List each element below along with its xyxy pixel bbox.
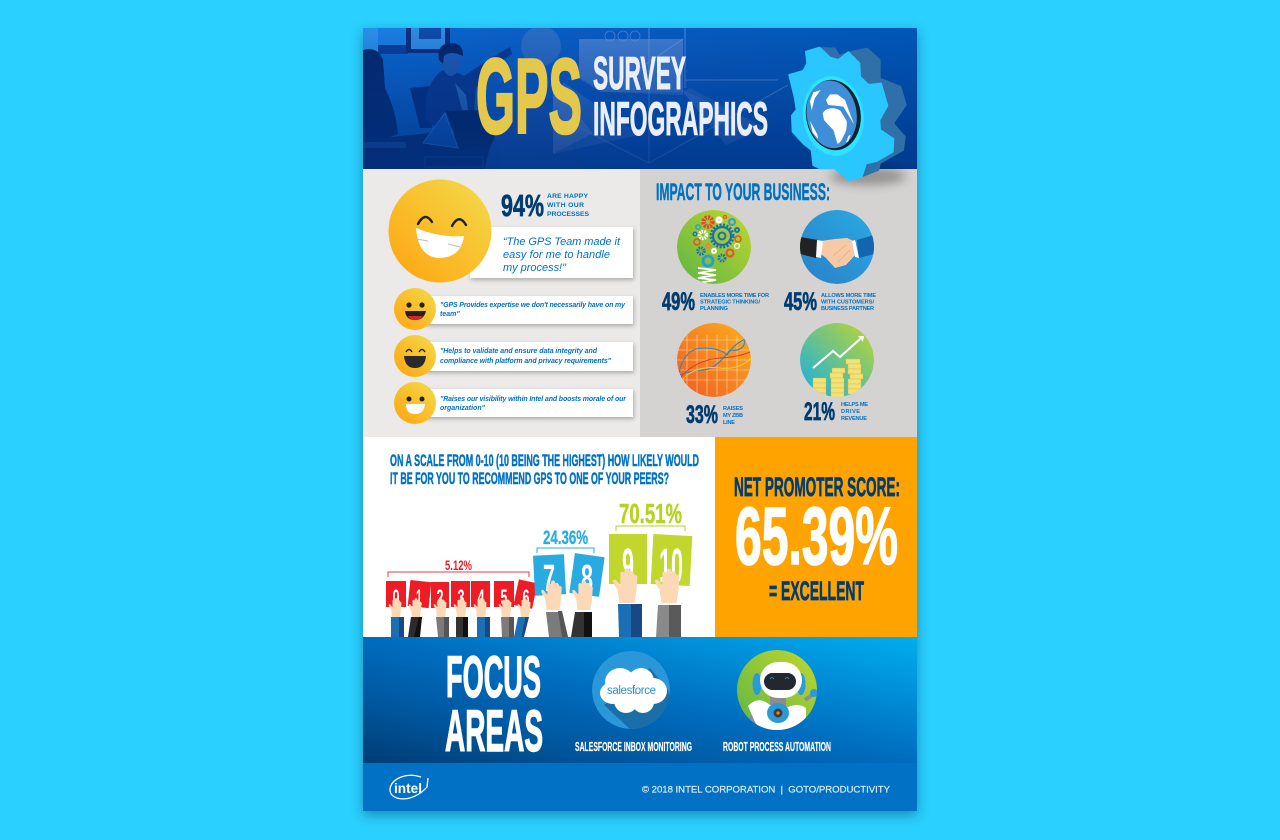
panel: impact — [640, 169, 917, 437]
callout: quote visibility: organization" — [440, 405, 486, 412]
callout: main quote — [470, 227, 633, 278]
icon: smiley black mouth — [394, 335, 436, 377]
panel: happiness — [363, 169, 640, 437]
icon: handshake — [800, 210, 874, 284]
heading: impact to your business: IMPACT TO YOUR BUSINESS: — [656, 179, 830, 206]
callout: quote data integrity: "Helps to validate and ensure data integrity and — [440, 348, 598, 355]
panel: focus areas — [363, 637, 917, 764]
chart: score 0 to 6 hands: 6 — [522, 585, 530, 610]
photo: meeting room — [363, 28, 561, 169]
icon: growth chart — [677, 323, 751, 397]
heading: survey question: IT BE FOR YOU TO RECOMMEND GPS TO ONE OF YOUR PEERS? — [390, 469, 669, 488]
score value: 65.39% — [735, 491, 898, 582]
panel: focus areas: FOCUS — [446, 645, 541, 710]
rating: = EXCELLENT — [769, 576, 864, 606]
stat: 21 percent: 21% — [804, 398, 835, 426]
stat: 33 percent: LINE — [723, 420, 735, 426]
chart: score 9 to 10 hands — [609, 498, 692, 637]
callout: quote visibility: "Raises our visibility within Intel and boosts morale of our — [440, 396, 627, 403]
icon: smiley white teeth — [394, 382, 436, 424]
stat: 33 percent: 33% — [686, 401, 718, 429]
heading: survey question — [390, 451, 699, 488]
callout: quote expertise — [425, 296, 633, 324]
callout: main quote: easy for me to handle — [503, 249, 610, 261]
stat: 45 percent: 45% — [784, 288, 817, 316]
infographic card — [363, 26, 917, 811]
icon: salesforce cloud: salesforce — [607, 685, 656, 697]
stat: 21 percent: REVENUE — [841, 416, 867, 422]
panel: recommendation survey — [386, 454, 699, 637]
stat: 49 percent — [662, 288, 769, 316]
stat: 45 percent: ALLOWS MORE TIME — [821, 293, 876, 299]
callout: quote visibility — [425, 389, 633, 417]
callout: main quote: “The GPS Team made it — [503, 236, 621, 248]
chart: score 0 to 6 hands: 2 — [436, 585, 444, 610]
stat: 33 percent: MY ZBB — [723, 413, 743, 419]
stat: 33 percent: RAISES — [723, 406, 743, 412]
label: 5.12 percent: 5.12% — [445, 557, 472, 573]
icon: gears lightbulb — [677, 210, 751, 284]
chart: score 0 to 6 hands: 0 — [392, 585, 400, 610]
icon: robot — [737, 650, 818, 732]
label: salesforce inbox monitoring: SALESFORCE INBOX MONITORING — [575, 739, 692, 754]
copyright: © 2018 INTEL CORPORATION | GOTO/PRODUCTIVITY — [642, 784, 891, 796]
chart: score 0 to 6 hands — [386, 557, 537, 637]
stat: 49 percent: STRATEGIC THINKING/ — [700, 300, 760, 306]
logo: intel — [390, 775, 428, 799]
panel: header banner — [363, 26, 917, 169]
icon: salesforce cloud — [592, 651, 670, 729]
chart: score 9 to 10 hands: 9 — [622, 540, 634, 593]
gear shadow — [830, 167, 906, 185]
label: robot process automation: ROBOT PROCESS AUTOMATION — [723, 739, 831, 754]
infographic card: INFOGRAPHICS — [593, 92, 768, 145]
panel: net promoter score — [715, 437, 917, 637]
infographic card: SURVEY — [593, 47, 686, 99]
stat: 94 percent happy: 94% — [501, 188, 544, 223]
label: 70.51 percent: 70.51% — [619, 498, 682, 529]
stat: 94 percent happy: ARE HAPPY — [547, 193, 588, 200]
panel: footer — [363, 763, 917, 811]
chart: score 0 to 6 hands: 5 — [500, 585, 508, 610]
stat: 49 percent: 49% — [662, 288, 695, 316]
chart: score 0 to 6 hands: 4 — [478, 585, 485, 610]
chart: score 0 to 6 hands: 3 — [458, 585, 464, 610]
stat: 45 percent: BUSINESS PARTNER — [821, 306, 874, 312]
heading: nps: NET PROMOTER SCORE: — [734, 472, 900, 502]
stat: 49 percent: PLANNING — [700, 306, 728, 312]
chart: score 7 to 8 hands — [533, 528, 605, 637]
panel: focus areas: AREAS — [445, 699, 543, 764]
callout: quote expertise: team" — [440, 311, 460, 318]
callout: main quote: my process!" — [503, 262, 567, 274]
label: 24.36 percent: 24.36% — [543, 528, 588, 549]
chart: score 7 to 8 hands: 7 — [543, 558, 555, 600]
chart: score 9 to 10 hands: 10 — [659, 540, 683, 593]
stat: 94 percent happy: WITH OUR — [547, 202, 584, 209]
chart: score 0 to 6 hands: 1 — [416, 585, 422, 610]
chart: score 7 to 8 hands: 8 — [581, 558, 593, 600]
stat: 49 percent: ENABLES MORE TIME FOR — [700, 293, 769, 299]
icon: big smiley — [388, 180, 492, 282]
stat: 21 percent: DRIVE — [841, 409, 860, 415]
callout: quote data integrity — [425, 342, 633, 371]
stat: 45 percent — [784, 288, 876, 316]
infographic card: GPS — [476, 36, 582, 156]
stat: 94 percent happy: PROCESSES — [547, 211, 589, 218]
callout: quote expertise: "GPS Provides expertise we don't necessarily have on my — [440, 302, 626, 309]
stat: 21 percent: HELPS ME — [841, 402, 868, 408]
icon: smiley red mouth — [394, 288, 436, 330]
icon: revenue coins — [800, 323, 874, 398]
logo: intel: intel — [394, 780, 422, 796]
icon: gear globe — [789, 48, 906, 180]
callout: quote data integrity: compliance with platform and privacy requirements" — [440, 358, 612, 365]
heading: survey question: ON A SCALE FROM 0-10 (10 BEING THE HIGHEST) HOW LIKELY WOULD — [390, 451, 699, 470]
stat: 45 percent: WITH CUSTOMERS/ — [821, 300, 874, 306]
decorative translucent triangles — [553, 28, 788, 163]
